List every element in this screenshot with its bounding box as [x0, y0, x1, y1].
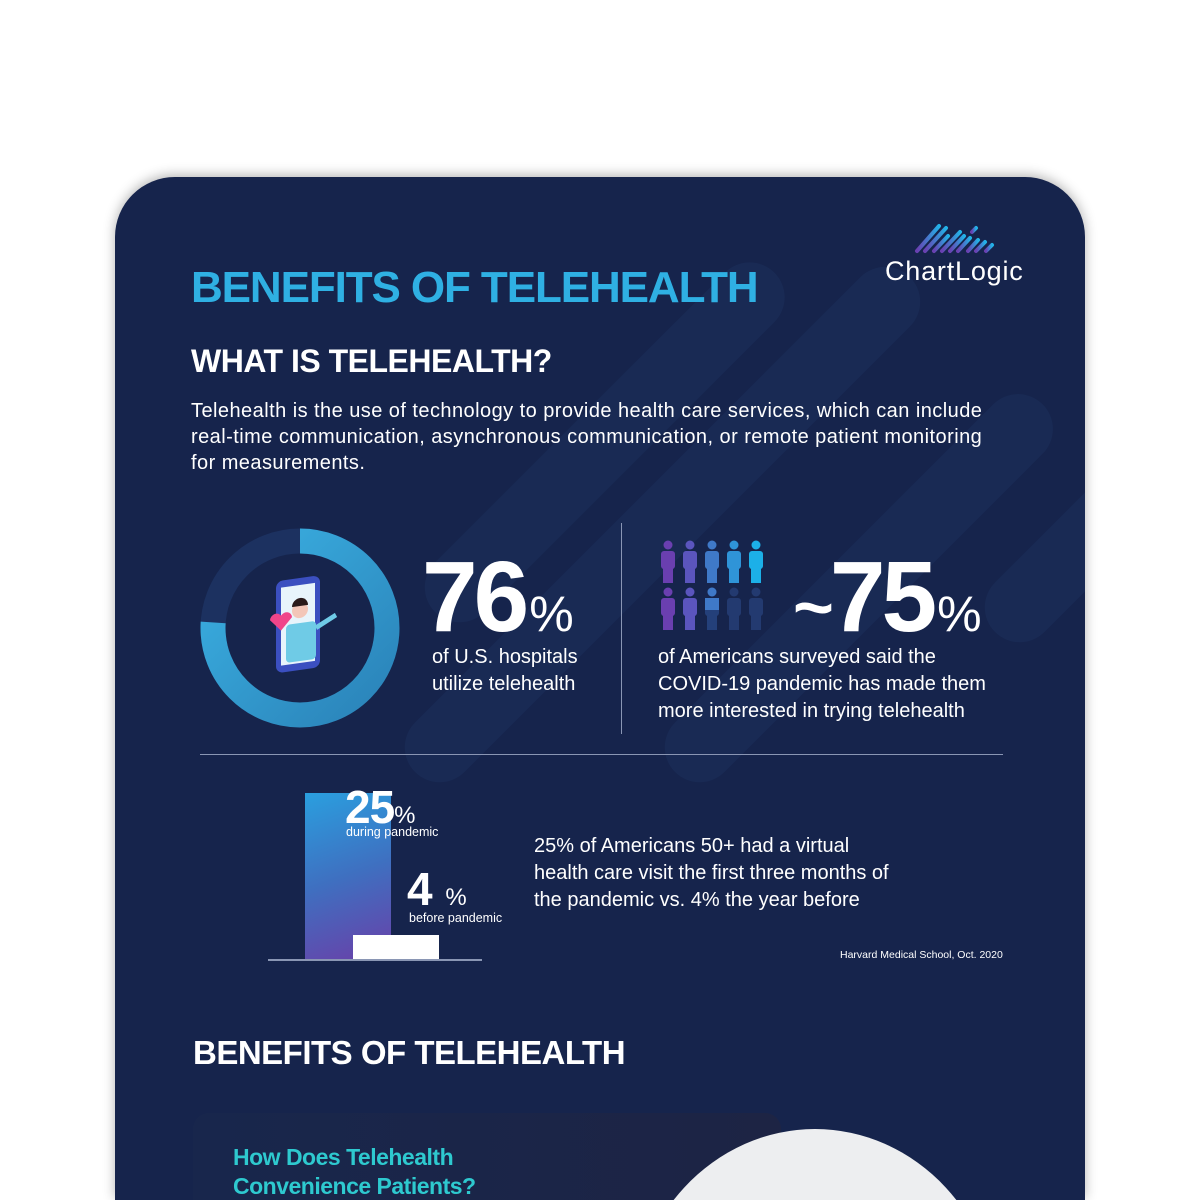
bar chart: 25% vs 4%: 25%	[345, 781, 416, 833]
source note: Harvard Medical School, Oct. 2020	[840, 949, 1003, 961]
definition text: for measurements.	[191, 452, 365, 474]
title: BENEFITS OF TELEHEALTH	[191, 263, 758, 312]
stat label: Americans surveyed: more interested in trying telehealth	[658, 700, 965, 722]
horizontal divider	[200, 754, 1003, 755]
bar chart caption: the pandemic vs. 4% the year before	[534, 889, 860, 911]
bar chart caption: 25% of Americans 50+ had a virtual	[534, 835, 849, 857]
panel heading: How Does Telehealth	[233, 1144, 453, 1170]
logo: ChartLogic: ChartLogic	[885, 256, 1024, 286]
stat: 76%: 76%	[422, 541, 574, 653]
icon: phone with doctor	[270, 573, 336, 674]
vertical divider	[621, 523, 622, 734]
people icon grid	[661, 540, 763, 630]
bar chart: 25% vs 4%	[268, 781, 502, 961]
heading: what is telehealth: WHAT IS TELEHEALTH?	[191, 343, 552, 379]
card background	[115, 177, 1085, 1200]
heading: benefits of telehealth: BENEFITS OF TELEHEALTH	[193, 1034, 625, 1071]
panel: convenience	[193, 1113, 781, 1200]
stat label: hospitals	[432, 646, 578, 695]
definition text: Telehealth is the use of technology to provide health care services, which can include	[191, 400, 982, 422]
stat label: Americans surveyed: COVID-19 pandemic has made them	[658, 673, 986, 695]
panel heading: Convenience Patients?	[233, 1173, 476, 1199]
stat: ~75%: ~75%	[793, 541, 982, 653]
bar chart: 25% vs 4%: before pandemic	[409, 911, 502, 925]
stat label: hospitals: utilize telehealth	[432, 673, 575, 695]
bar chart caption	[534, 835, 889, 911]
stat label: hospitals: of U.S. hospitals	[432, 646, 578, 668]
logo: ChartLogic	[885, 224, 1024, 286]
illustration circle	[674, 1129, 956, 1200]
definition text	[191, 400, 982, 474]
stat label: Americans surveyed	[658, 646, 986, 722]
bar chart caption: health care visit the first three months of	[534, 862, 889, 884]
bar chart: 25% vs 4%: during pandemic	[346, 825, 438, 839]
panel heading	[233, 1144, 476, 1199]
donut chart 76%	[200, 528, 400, 728]
bar chart: 25% vs 4%: 4 %	[407, 863, 467, 915]
definition text: real-time communication, asynchronous communication, or remote patient monitoring	[191, 426, 982, 448]
stat label: Americans surveyed: of Americans surveyed said the	[658, 646, 936, 668]
